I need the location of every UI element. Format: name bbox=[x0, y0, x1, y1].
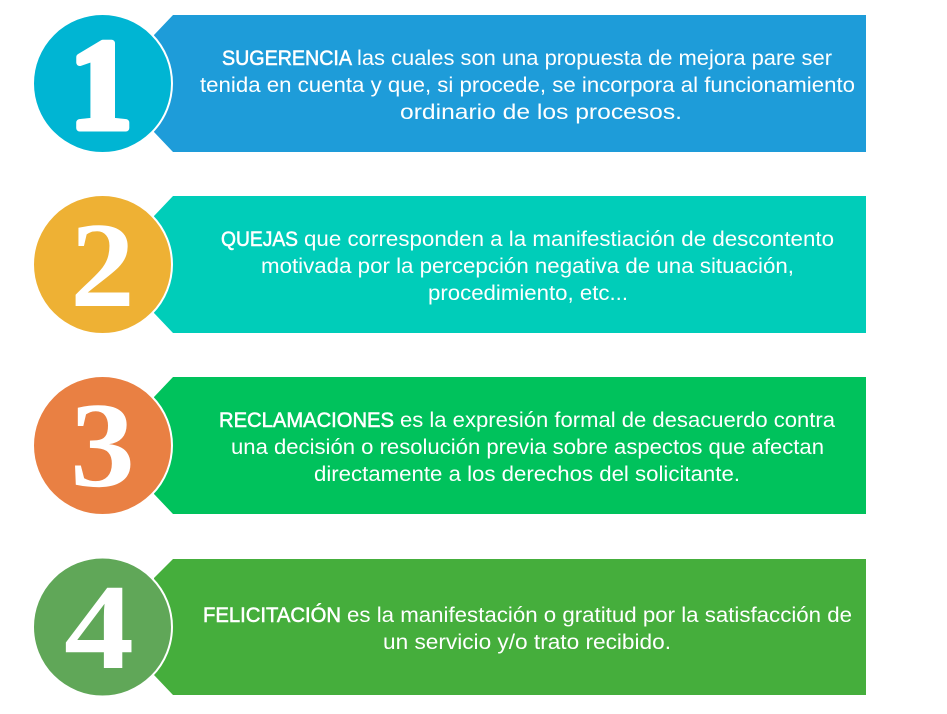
circle 2 bbox=[33, 195, 172, 334]
number 3: 3 bbox=[70, 378, 135, 513]
text block 4 bbox=[203, 604, 852, 654]
number 2: 2 bbox=[70, 198, 135, 333]
panel: quejas bbox=[33, 195, 866, 334]
banner 1 bbox=[154, 15, 866, 152]
banner 3 bbox=[154, 377, 866, 514]
number 1: 1 bbox=[70, 15, 132, 156]
text block 2: procedimiento, etc... bbox=[428, 282, 628, 305]
text block 1: SUGERENCIA bbox=[222, 47, 352, 70]
circle 1 bbox=[33, 14, 172, 153]
circle 3 bbox=[33, 376, 172, 515]
panel: sugerencia bbox=[33, 14, 866, 156]
panel: reclamaciones bbox=[33, 376, 866, 515]
text block 1: tenida en cuenta y que, si procede, se incorpora al funcionamiento bbox=[200, 74, 855, 97]
text block 4: es la manifestación o gratitud por la satisfacción de bbox=[347, 604, 852, 627]
text block 3: RECLAMACIONES bbox=[219, 409, 394, 432]
text block 2: motivada por la percepción negativa de una situación, bbox=[261, 255, 794, 278]
panel: felicitacion bbox=[33, 558, 866, 696]
text block 2 bbox=[221, 228, 834, 305]
text block 3 bbox=[219, 409, 835, 486]
banner 2 bbox=[154, 196, 866, 333]
text block 2: que corresponden a la manifestiación de descontento bbox=[304, 228, 834, 251]
text block 1: ordinario de los procesos. bbox=[400, 101, 682, 124]
text block 3: una decisión o resolución previa sobre aspectos que afectan bbox=[231, 436, 824, 459]
banner 4 bbox=[154, 559, 866, 695]
number 4: 4 bbox=[64, 560, 134, 695]
text block 4: un servicio y/o trato recibido. bbox=[383, 631, 671, 654]
circle 4 bbox=[33, 558, 172, 696]
text block 1: las cuales son una propuesta de mejora pare ser bbox=[357, 47, 832, 70]
text block 3: directamente a los derechos del solicitante. bbox=[314, 463, 740, 486]
text block 2: QUEJAS bbox=[221, 228, 298, 251]
text block 1 bbox=[200, 47, 855, 124]
text block 3: es la expresión formal de desacuerdo contra bbox=[400, 409, 835, 432]
text block 4: FELICITACIÓN bbox=[203, 604, 341, 627]
